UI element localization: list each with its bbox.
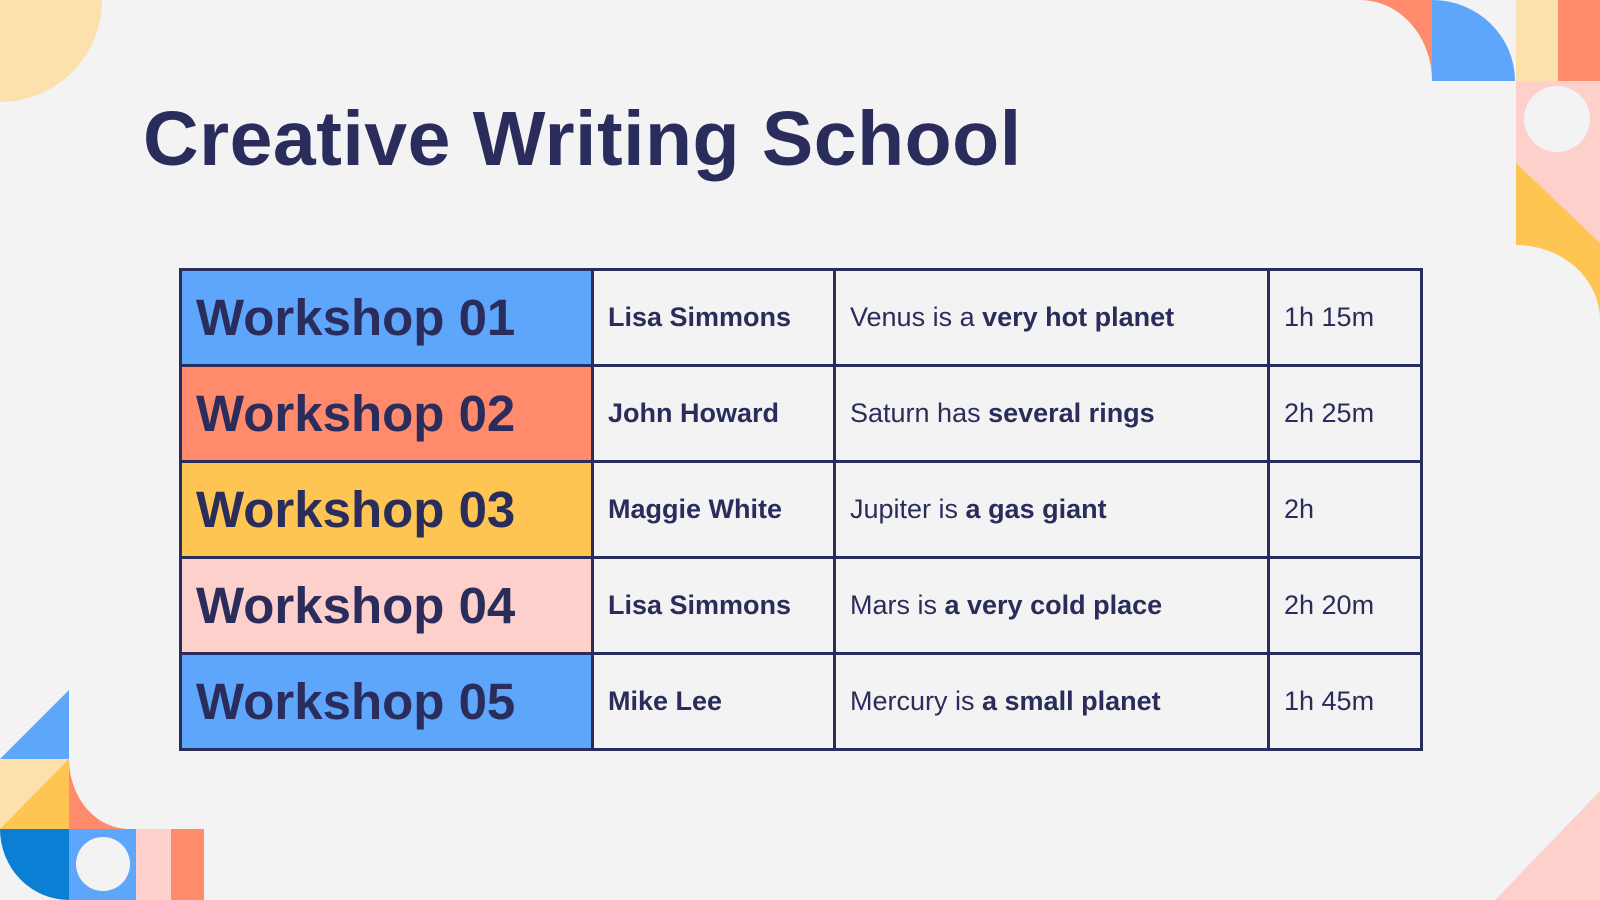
table: workshops: Lisa Simmons [608, 590, 791, 620]
table: workshops: Workshop 01 [196, 289, 515, 346]
table: workshops: Workshop 03 [196, 481, 515, 538]
table: workshops: 2h 25m [1284, 398, 1374, 428]
table: workshops: Lisa Simmons [608, 302, 791, 332]
table: workshops: Mike Lee [608, 686, 722, 716]
table: workshops: Jupiter is a gas giant [850, 494, 1107, 524]
table: workshops: Mars is a very cold place [850, 590, 1162, 620]
table: workshops: 1h 15m [1284, 302, 1374, 332]
table: workshops [179, 268, 1423, 751]
table: workshops: Saturn has several rings [850, 398, 1155, 428]
title: Creative Writing School [143, 96, 1022, 182]
table: workshops: Workshop 02 [196, 385, 515, 442]
table: workshops: 2h 20m [1284, 590, 1374, 620]
table: workshops: 2h [1284, 494, 1314, 524]
table: workshops: Mercury is a small planet [850, 686, 1161, 716]
table: workshops: Venus is a very hot planet [850, 302, 1174, 332]
table: workshops: Workshop 04 [196, 577, 515, 634]
table: workshops: 1h 45m [1284, 686, 1374, 716]
table: workshops: Workshop 05 [196, 673, 515, 730]
table: workshops: Maggie White [608, 494, 782, 524]
table: workshops: John Howard [608, 398, 779, 428]
